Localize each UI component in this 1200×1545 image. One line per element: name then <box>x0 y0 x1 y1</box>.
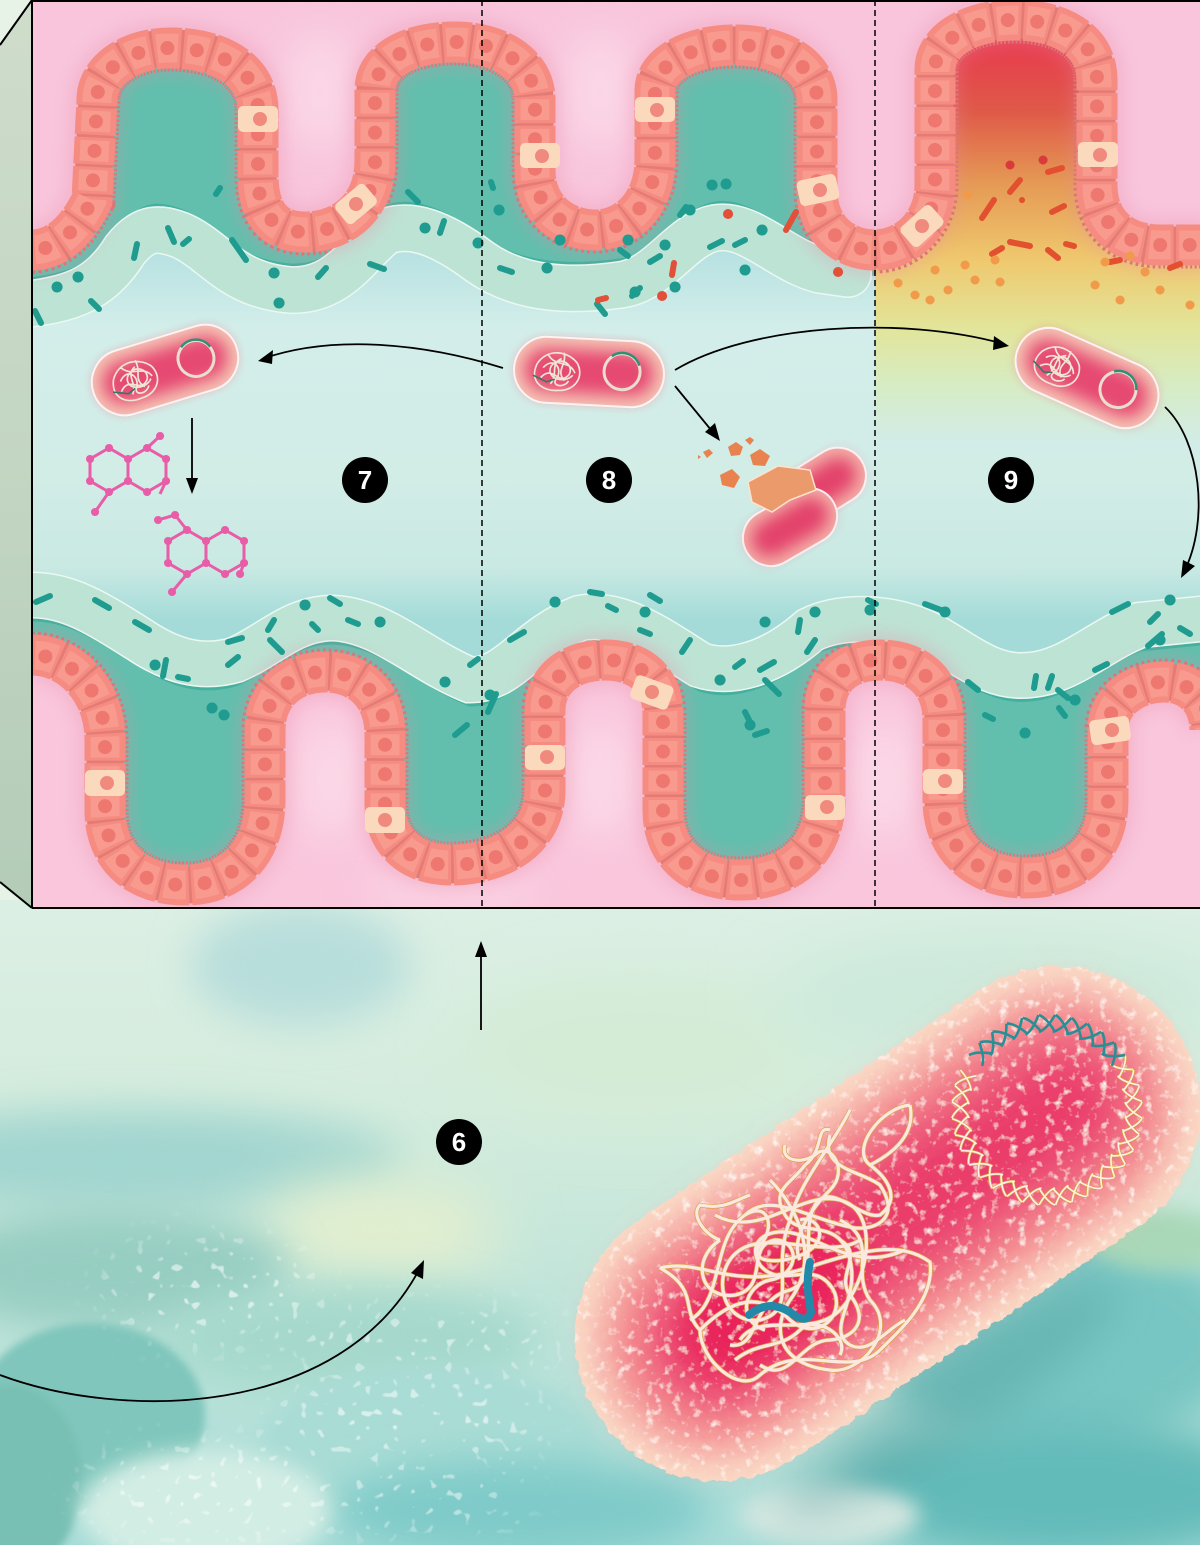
small bacterium: right <box>1011 324 1163 432</box>
arrow: centre bacterium to right bacterium <box>675 328 1009 370</box>
lamina teal: upper <box>33 60 874 279</box>
molecule: upper metabolite <box>90 436 166 512</box>
brush border: upper <box>32 20 1200 250</box>
small bacterium: left <box>87 320 243 420</box>
commensal bacteria: teal rods and cocci, top <box>35 182 762 323</box>
pink tissue: lower <box>32 655 1200 908</box>
pathogen debris: red rods near dashed line <box>598 212 838 300</box>
arrow: centre bacterium to left bacterium <box>258 344 503 368</box>
panel frame <box>32 1 1200 908</box>
panel: magnified gut lumen <box>20 0 1200 908</box>
arrow: sweep to label 6 <box>0 1260 424 1401</box>
side face of magnified block <box>0 0 32 908</box>
pink tissue: upper <box>32 0 1200 250</box>
commensal bacteria: teal rods and cocci, bottom <box>36 592 1190 735</box>
lysed bacterium with fragments <box>698 437 876 576</box>
arrows <box>0 328 1199 1401</box>
bokeh highlights <box>80 1240 570 1535</box>
arrow: bacterium to metabolite <box>186 418 198 494</box>
inflamed gradient zone <box>875 38 1200 429</box>
arrow: right bacterium down to mucus <box>1165 407 1199 578</box>
step badge 9: 9 <box>1004 465 1018 495</box>
chromosome tangle <box>660 1105 930 1381</box>
lumen background <box>33 251 1200 656</box>
mucus layer: top <box>20 205 848 305</box>
step badge 8 <box>586 457 632 503</box>
step badge 8: 8 <box>602 465 616 495</box>
step badge 6: 6 <box>452 1127 466 1157</box>
step badge 9 <box>988 457 1034 503</box>
step badge 7: 7 <box>358 465 372 495</box>
step badge 7 <box>342 457 388 503</box>
molecule: lower metabolite <box>158 515 244 592</box>
small bacterium: centre <box>512 335 666 409</box>
background: blurred gut surface <box>0 900 1200 1545</box>
lamina teal: lower <box>33 618 1200 866</box>
epithelium: bottom crypt cells <box>32 655 1200 885</box>
orange toxins particles in inflamed zone <box>898 160 1190 305</box>
goblet cells: pale cells in epithelium <box>85 97 1132 833</box>
mucus layer: bottom <box>32 595 1200 702</box>
epithelium: top crypt cells <box>32 20 1200 250</box>
pink highlights <box>285 30 920 905</box>
gene insert: blue segment <box>749 1262 811 1319</box>
dashed divider lines <box>482 0 875 908</box>
large bacterium <box>520 911 1200 1545</box>
arrow: centre bacterium to lysed bacterium <box>675 386 720 441</box>
arrow: large bacterium up to panel <box>475 941 487 1030</box>
step badge 6 <box>436 1119 482 1165</box>
plasmid ring <box>952 1015 1142 1205</box>
brush border: lower <box>32 655 1200 885</box>
